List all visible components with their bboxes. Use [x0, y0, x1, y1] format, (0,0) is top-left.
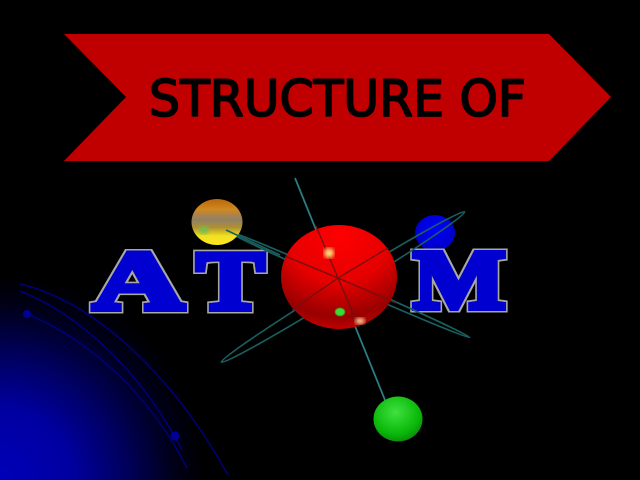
blue corner glow — [0, 275, 205, 480]
arc node: upper — [23, 310, 31, 318]
title banner — [64, 34, 611, 161]
highlight: green — [335, 308, 345, 316]
word: A T M letters — [92, 234, 506, 328]
electron: green — [374, 396, 422, 442]
decorative arcs — [20, 284, 228, 475]
nucleus lines — [285, 226, 396, 327]
arc node: lower — [170, 432, 180, 440]
green patch — [199, 226, 209, 234]
electron: blue — [415, 215, 455, 251]
electron: orange — [192, 199, 280, 255]
letter M: M — [413, 234, 506, 327]
highlight: yellow — [324, 248, 334, 258]
title text: STRUCTURE OF — [149, 70, 526, 128]
orbit tail — [226, 230, 280, 255]
highlight: white — [355, 318, 365, 324]
letter T: T — [196, 235, 265, 328]
orbits behind nucleus — [218, 178, 471, 405]
letter A: A — [92, 235, 186, 328]
nucleus: red sphere — [281, 225, 397, 329]
